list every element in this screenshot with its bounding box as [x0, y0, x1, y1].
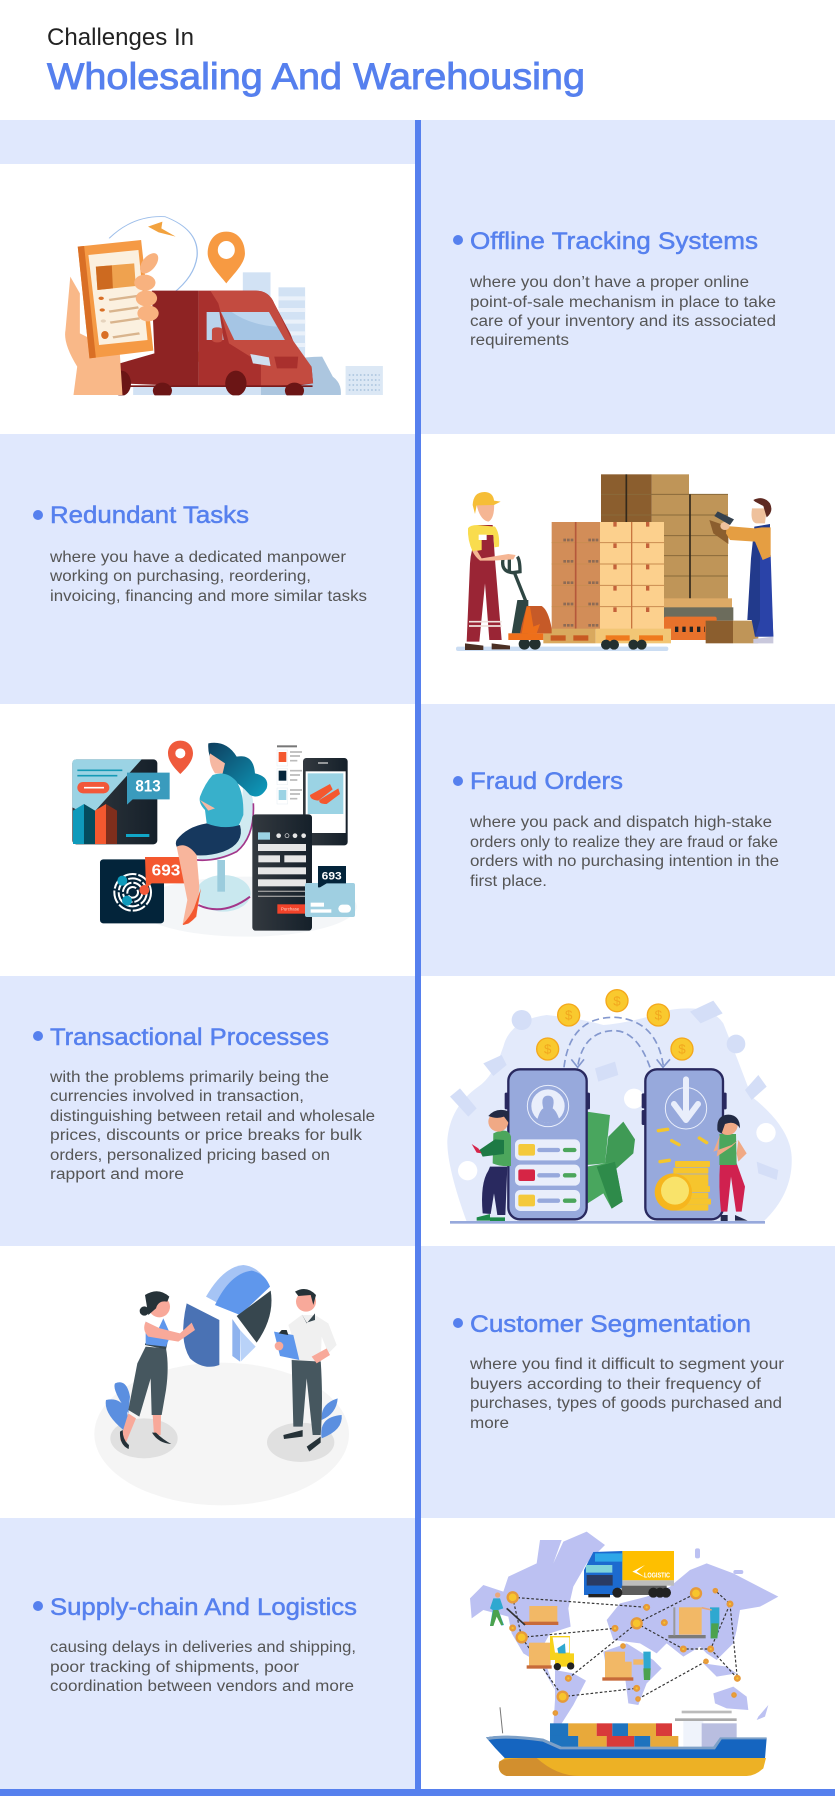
- ground: [450, 1221, 765, 1224]
- panel: fraud orders text: first place.: [470, 873, 547, 890]
- worker left: [467, 525, 502, 642]
- panel: redundant tasks text: where you have a dedicated manpower: [49, 549, 346, 566]
- panel: customer segmentation text: purchases, types of goods purchased and: [470, 1395, 782, 1412]
- panel: supply-chain and logistics text: Supply-chain And Logistics: [50, 1594, 357, 1621]
- callout: 693 dark: 693: [322, 870, 342, 882]
- panel: transactional processes text: Transactional Processes: [50, 1024, 329, 1051]
- panel: transactional processes text: [33, 1024, 375, 1183]
- callout: 693 dark: [318, 866, 346, 887]
- illustration: mobile money transfer between two phones: $: [655, 1008, 663, 1023]
- callout: 813: [127, 773, 170, 805]
- callout: 693 red: [145, 857, 188, 888]
- panel: offline tracking systems text: care of your inventory and its associated: [470, 313, 776, 330]
- logistic truck: LOGISTIC: [644, 1570, 671, 1579]
- panel: customer segmentation text: [453, 1311, 784, 1432]
- hand holding phone: [65, 277, 122, 395]
- panel: offline tracking systems text: requirements: [470, 332, 569, 349]
- panel: transactional processes text: orders, personalized pricing based on: [50, 1147, 330, 1164]
- cargo stacks and workers: [490, 1592, 719, 1681]
- panel: transactional processes text: with the problems primarily being the: [49, 1069, 329, 1086]
- van: [112, 291, 313, 399]
- dashed transfer arrows: [564, 1017, 663, 1067]
- panel: fraud orders text: orders with no purchasing intention in the: [470, 853, 779, 870]
- illustration: mobile money transfer between two phones: $: [678, 1042, 686, 1057]
- woman: [719, 1163, 745, 1212]
- phone left: [505, 1093, 509, 1109]
- illustration: mobile money transfer between two phones: $: [544, 1042, 552, 1057]
- title: Wholesaling And Warehousing: [47, 56, 585, 97]
- illustration: woman shopping with phone and fraud alerts: [72, 741, 357, 937]
- world map: [470, 1532, 778, 1727]
- man: [482, 1167, 507, 1215]
- front stack of boxes: [552, 522, 600, 629]
- icon: paper planes: [148, 222, 208, 363]
- coins: [537, 990, 693, 1060]
- panel: redundant tasks text: invoicing, financing and more similar tasks: [50, 588, 367, 605]
- panel: supply-chain and logistics text: poor tracking of shipments, poor: [50, 1659, 299, 1676]
- pie pieces: [206, 1265, 270, 1315]
- container ship: [486, 1707, 767, 1776]
- panel: customer segmentation text: Customer Segmentation: [470, 1311, 751, 1338]
- product list and phone: [277, 745, 297, 747]
- panel: redundant tasks text: [33, 502, 367, 605]
- panel: transactional processes text: prices, discounts or price breaks for bulk: [50, 1127, 362, 1144]
- callout: 813: 813: [135, 776, 161, 795]
- woman on chair: [196, 875, 251, 912]
- panel: offline tracking systems text: Offline Tracking Systems: [470, 228, 758, 255]
- panel: transactional processes text: currencies involved in transaction,: [50, 1088, 304, 1105]
- illustration: mobile money transfer between two phones: $: [613, 993, 621, 1008]
- callout: 693 red: 693: [152, 862, 180, 879]
- illustration: global logistics map with truck and ship: [470, 1532, 778, 1776]
- checkout phone: [252, 814, 312, 931]
- panel: supply-chain and logistics text: coordination between vendors and more: [50, 1678, 354, 1695]
- leaves: [106, 1382, 130, 1430]
- illustration: mobile money transfer between two phones: $: [565, 1008, 573, 1023]
- title: Challenges In: [47, 24, 194, 51]
- panel: fraud orders text: where you pack and dispatch high-stake: [469, 814, 772, 831]
- panel: fraud orders text: Fraud Orders: [470, 768, 623, 795]
- panel: customer segmentation text: more: [470, 1415, 509, 1432]
- route lines: [513, 1591, 737, 1699]
- illustration: warehouse workers with pallets: [456, 474, 773, 651]
- back stack of boxes: [652, 474, 689, 599]
- illustration: customer segmentation pie chart: [94, 1265, 349, 1505]
- panel: offline tracking systems text: where you don’t have a proper online: [469, 274, 749, 291]
- panel: offline tracking systems text: point-of-sale mechanism in place to take: [470, 294, 776, 311]
- icon: location pin: [168, 741, 193, 774]
- man: [292, 1360, 322, 1435]
- illustration: delivery van with phone tracking: [65, 217, 383, 399]
- fingerprint tile: [100, 859, 164, 923]
- panel: transactional processes text: distinguishing between retail and wholesale: [50, 1108, 375, 1125]
- illustration: woman shopping with phone and fraud alerts: Purchase: [281, 907, 300, 912]
- panel: fraud orders text: [453, 768, 779, 890]
- panel: offline tracking systems text: [453, 228, 776, 349]
- panel: fraud orders text: orders only to realize they are fraud or fake: [470, 834, 778, 851]
- credit card with 693 tag: [305, 883, 355, 917]
- panel: supply-chain and logistics text: [33, 1594, 357, 1695]
- chart card: [72, 759, 157, 844]
- icon: map pin: [208, 232, 245, 283]
- woman: [128, 1347, 168, 1417]
- panel: redundant tasks text: Redundant Tasks: [50, 502, 249, 529]
- panel: customer segmentation text: buyers according to their frequency of: [470, 1376, 762, 1393]
- phone right: [642, 1093, 646, 1108]
- panel: redundant tasks text: working on purchasing, reordering,: [49, 568, 311, 585]
- worker right: [747, 524, 773, 637]
- cash: [587, 1112, 635, 1209]
- panel: customer segmentation text: where you find it difficult to segment your: [469, 1356, 784, 1373]
- pallet and jack: [543, 629, 596, 643]
- logistic truck: [584, 1551, 674, 1598]
- title: [47, 24, 585, 97]
- illustration: mobile money transfer between two phones: [447, 990, 792, 1224]
- panel: transactional processes text: rapport and more: [50, 1166, 184, 1183]
- panel: supply-chain and logistics text: causing delays in deliveries and shipping,: [50, 1639, 356, 1656]
- map nodes: [508, 1588, 740, 1715]
